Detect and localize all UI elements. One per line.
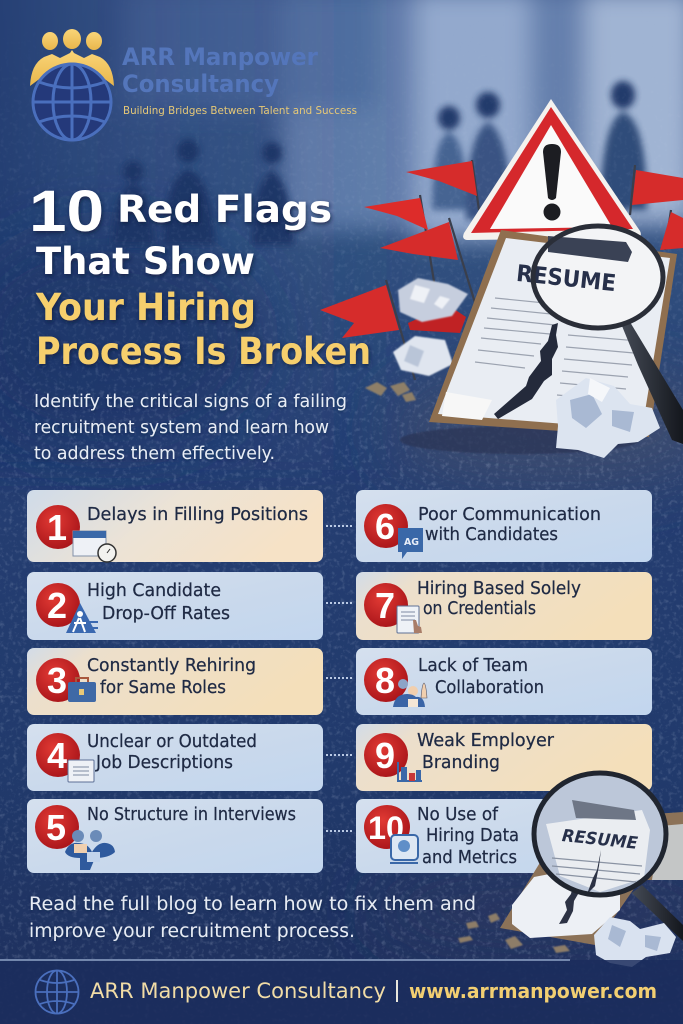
subtitle text: Identify the critical signs of a failing [34,391,347,412]
number 1 [36,505,80,549]
blurred people silhouettes [112,81,647,245]
card 10: Hiring Data [426,826,519,846]
card 3: for Same Roles [100,678,226,698]
icon: interview panel [65,830,115,870]
label: Weak Employer [417,731,555,751]
label: No Structure in Interviews [87,805,296,825]
label: Lack of Team [418,656,528,676]
icon: chat bubble [398,528,423,559]
number 5: 5 [46,807,66,848]
number 5 [35,805,79,849]
label: Constantly Rehiring [87,656,256,676]
card 8 [356,648,652,715]
title: Red Flags [117,188,332,231]
card 10 [356,799,652,873]
number 8 [364,658,408,702]
tagline: Building Bridges Between Talent and Success [123,105,357,117]
warning triangle [463,99,641,240]
list column connectors [326,526,353,831]
closing call to action text: Read the full blog to learn how to fix them and [29,894,476,915]
footer separator [396,980,398,1002]
number 4: 4 [47,735,67,776]
icon: person leaving [66,603,98,633]
scattered ground debris [365,278,640,454]
card 7: on Credentials [423,599,536,619]
card 1 [27,490,323,562]
card 4: Job Descriptions [95,753,233,773]
footer band [0,959,683,1024]
title: That Show [36,240,255,283]
number 9: 9 [375,735,395,776]
label: Delays in Filling Positions [87,505,308,525]
card 9 [356,724,652,791]
subtitle text: to address them effectively. [34,443,275,464]
small debris [458,913,570,953]
number 6: 6 [375,506,395,547]
icon: exclamation mark [543,144,561,220]
card 10: and Metrics [422,848,517,868]
resume clipboard torn [429,230,677,437]
title [29,179,371,373]
number 3: 3 [47,660,67,701]
logo [30,29,357,140]
card 9: Branding [422,753,500,773]
icon: declining chart [398,762,422,781]
label: Poor Communication [418,505,601,525]
closing call to action text: improve your recruitment process. [29,921,355,942]
card 3 [27,648,323,715]
lower crumpled paper [594,917,676,967]
closing call to action text [29,894,476,942]
label: Hiring Based Solely [417,579,581,599]
footer company name: ARR Manpower Consultancy [90,979,386,1003]
subtitle text [34,391,347,464]
logo: Consultancy [122,70,279,98]
lower resume clipboard [500,812,683,945]
icon: data dashboard [390,835,418,863]
torn paper crack [494,323,558,419]
icon: document [68,760,94,782]
number 7 [364,583,408,627]
icon: certificate with pointer [397,606,422,633]
magnifying glass with resume [515,226,683,444]
label: No Use of [417,805,499,825]
number 6 [364,504,408,548]
number 2: 2 [47,585,67,626]
red flags [320,160,683,380]
footer website: www.arrmanpower.com [409,979,657,1003]
card 6: with Candidates [425,525,558,545]
number 10: 10 [368,810,404,846]
number 3 [36,658,80,702]
number 10 [364,805,410,849]
title: Process Is Broken [36,330,371,373]
icon: calendar and clock [73,531,116,562]
icon: chat bubble: AG [404,537,419,548]
card 7 [356,572,652,640]
card 6 [356,490,652,562]
icon: team members [393,679,427,707]
icon: blue globe [33,64,111,140]
number 2 [36,583,80,627]
card 2 [27,572,323,640]
crumpled paper [556,378,660,458]
title: Your Hiring [35,286,256,329]
resume label: RESUME [515,261,617,297]
number 7: 7 [375,585,395,626]
card 2: Drop-Off Rates [102,604,230,624]
card 5 [27,799,323,873]
number 8: 8 [375,660,395,701]
resume label: RESUME [561,826,639,854]
icon: briefcase [68,678,96,702]
number 1: 1 [47,507,67,548]
number 9 [364,733,408,777]
icon: footer globe [36,970,78,1014]
lower magnifying glass [534,773,683,941]
subtitle text: recruitment system and learn how [34,417,329,438]
card 8: Collaboration [435,678,544,698]
label: High Candidate [87,581,221,601]
card 4 [27,724,323,791]
number 4 [36,733,80,777]
title: 10 [29,179,104,244]
icon: three gold people [30,29,114,86]
label: Unclear or Outdated [87,732,257,752]
company name: ARR Manpower [122,43,318,71]
